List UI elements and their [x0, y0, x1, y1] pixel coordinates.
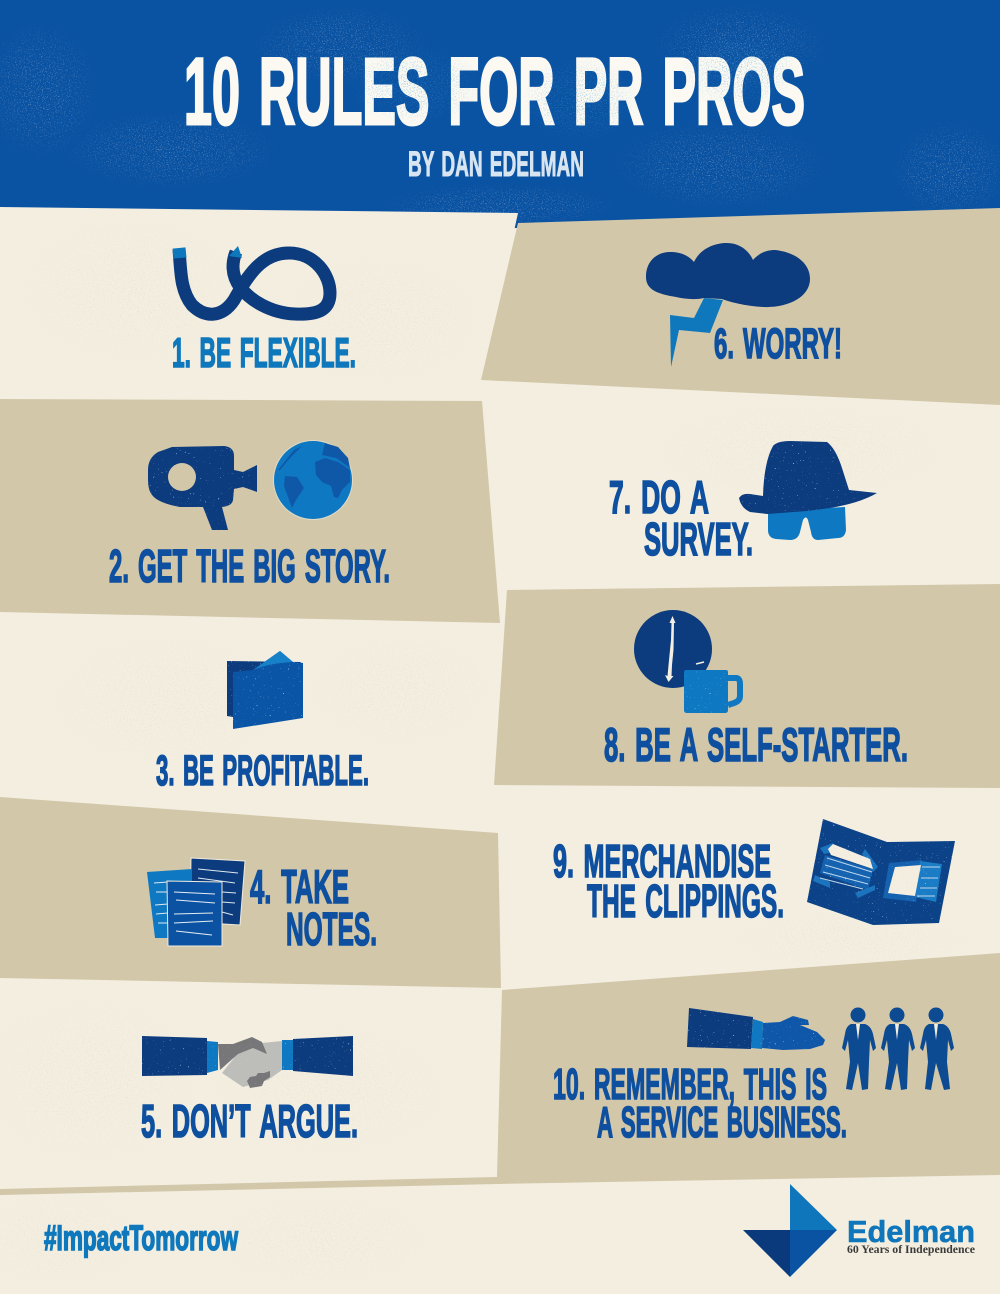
- panel: paper speckle texture: [26, 260, 899, 1260]
- text: wordmark: Edelman: [847, 1214, 975, 1249]
- panel: rule 6 background: [481, 208, 1000, 405]
- icon: clippings folder: [807, 819, 955, 925]
- rule 2: get the big story: [109, 440, 390, 592]
- panel: rule 10 background: [0, 953, 1000, 1195]
- icon: clock and mug: [634, 610, 740, 713]
- icon: wallet: [227, 651, 303, 729]
- icon: movie camera: [148, 446, 257, 530]
- text: tagline: 60 Years of Independence: [847, 1242, 976, 1256]
- rule 7: do a survey: [609, 441, 877, 565]
- text: rule 7 line 2: SURVEY.: [644, 513, 753, 565]
- text: rule 4 line 1: 4. TAKE: [250, 860, 349, 913]
- text: rule 4 line 2: NOTES.: [286, 903, 377, 955]
- panel: rule 1 background: [0, 207, 518, 398]
- rule 3: be profitable: [156, 651, 369, 795]
- panel: blue header: [0, 0, 1000, 230]
- hashtag: #ImpactTomorrow: [44, 1219, 239, 1258]
- text: rule 2: 2. GET THE BIG STORY.: [109, 540, 390, 592]
- icon: Edelman mark: [743, 1184, 837, 1277]
- rule 8: be a self-starter: [604, 610, 908, 771]
- panel: rule 2 background: [0, 399, 500, 623]
- text: rule 1: 1. BE FLEXIBLE.: [172, 329, 356, 376]
- rule 9: merchandise the clippings: [553, 819, 955, 927]
- panel: rule 4 background: [0, 797, 501, 988]
- rule 5: don't argue: [141, 1036, 358, 1147]
- text: rule 7 line 1: 7. DO A: [609, 471, 709, 523]
- icon: flexible rope: [179, 246, 330, 314]
- rule 1: be flexible: [172, 246, 356, 376]
- panel: rule 8 background: [494, 584, 1000, 788]
- text: rule 5: 5. DON’T ARGUE.: [141, 1095, 358, 1147]
- title: [186, 40, 804, 137]
- icon: three people: [842, 1008, 954, 1090]
- icon: globe: [273, 440, 353, 520]
- rule 4: take notes: [147, 858, 377, 955]
- icon: handshake: [142, 1036, 353, 1088]
- text: rule 9 line 1: 9. MERCHANDISE: [553, 835, 771, 887]
- logo: Edelman: [743, 1184, 976, 1277]
- text: rule 9 line 2: THE CLIPPINGS.: [587, 875, 784, 927]
- icon: hat and sunglasses: [739, 441, 877, 540]
- rule 10: remember, this is a service business: [553, 1008, 954, 1147]
- icon: storm cloud: [646, 243, 810, 367]
- byline: BY DAN EDELMAN: [408, 145, 584, 184]
- rule 6: worry: [646, 243, 842, 368]
- icon: outstretched arm: [687, 1008, 825, 1050]
- icon: note pages: [147, 858, 245, 946]
- text: rule 3: 3. BE PROFITABLE.: [156, 747, 369, 795]
- text: rule 6: 6. WORRY!: [714, 320, 842, 368]
